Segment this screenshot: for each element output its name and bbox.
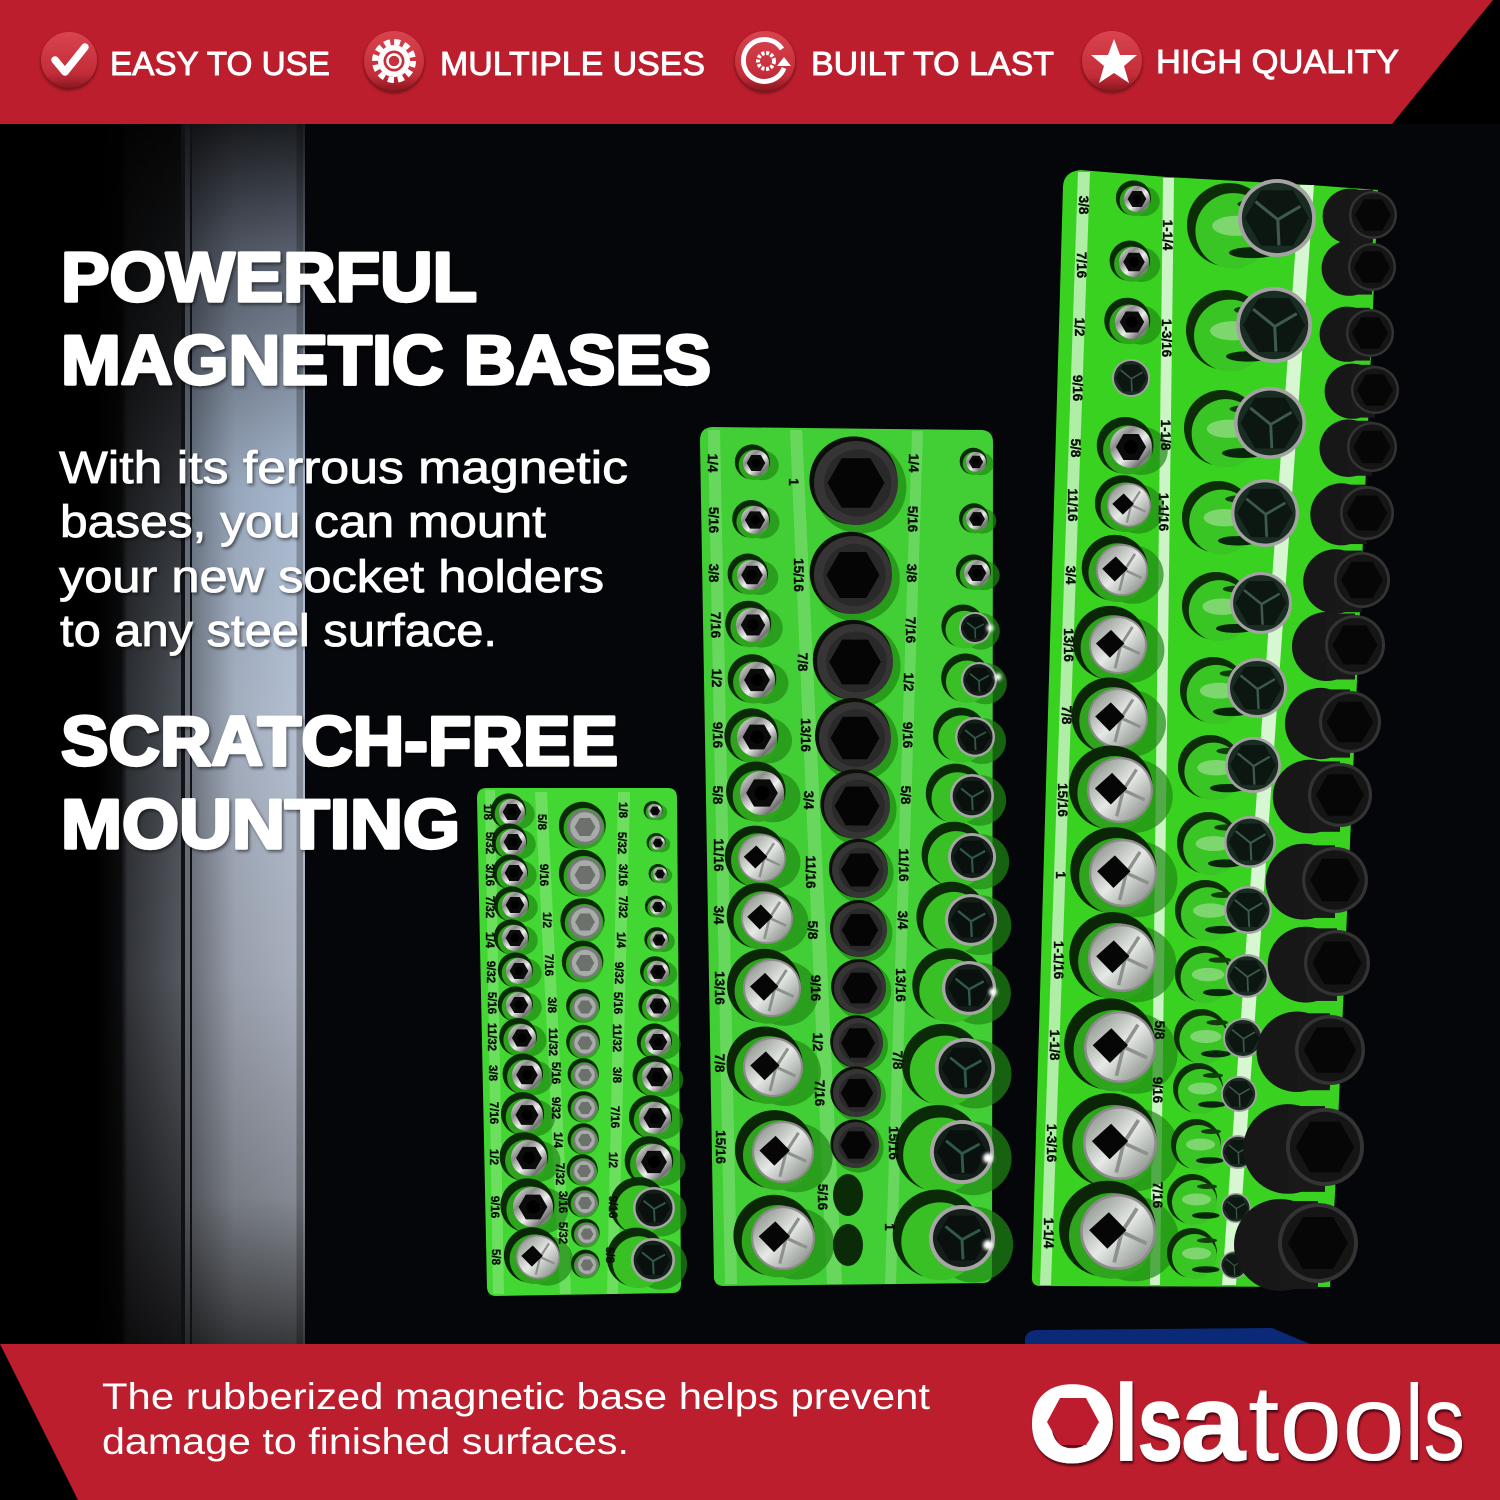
middle tray column 3 sockets and labels: 9/16	[900, 722, 915, 749]
small tray column 3 sockets and labels	[603, 801, 687, 1290]
small tray column 1 sockets and labels: 11/32	[485, 1023, 497, 1051]
middle tray column 1 sockets and labels: 3/8	[706, 564, 721, 583]
small tray column 3 sockets and labels: 3/16	[616, 864, 628, 886]
middle tray column 2 impact sockets and labels: 7/8	[795, 653, 810, 672]
middle tray column 1 sockets and labels: 15/16	[713, 1130, 728, 1164]
top banner	[0, 0, 1493, 124]
middle tray column 3 sockets and labels: 3/4	[895, 911, 910, 930]
middle tray column 3 sockets and labels: 1/2	[901, 673, 916, 691]
middle tray column 3 sockets and labels: 7/8	[890, 1051, 905, 1070]
small tray column 1 sockets and labels: 5/32	[483, 832, 495, 854]
icon: refresh gear	[735, 31, 795, 91]
middle tray column 2 impact sockets and labels: 7/16	[812, 1080, 827, 1107]
small tray column 1 sockets and labels: 1/4	[483, 932, 495, 949]
socket holder: large tray	[1032, 170, 1399, 1291]
icon: star	[1082, 31, 1142, 91]
middle tray column 2 impact sockets and labels: 11/16	[803, 855, 818, 889]
middle tray column 3 sockets and labels: 15/16	[886, 1126, 901, 1160]
small tray column 3 sockets and labels: 1/4	[614, 932, 626, 949]
large tray column 2 sockets and labels: 1-1/4	[1160, 220, 1175, 251]
small tray column 1 sockets and labels: 3/16	[483, 864, 495, 886]
middle tray column 3 sockets and labels: 5/16	[905, 506, 920, 533]
middle tray column 2 impact sockets and labels: 1	[786, 478, 801, 486]
middle tray column 2 impact sockets and labels: 13/16	[798, 718, 813, 752]
large tray column 1 sockets and labels: 1-1/8	[1047, 1030, 1062, 1061]
large tray column 1 sockets and labels: 11/16	[1065, 488, 1080, 522]
small tray column 2 bit sockets and labels: 9/32	[549, 1097, 561, 1119]
large tray column 1 sockets and labels: 1/2	[1072, 318, 1087, 336]
middle tray column 2 impact sockets and labels: 9/16	[808, 975, 823, 1002]
feature label: built to last: BUILT TO LAST	[811, 45, 1054, 82]
logo: Olsatools: ls	[1405, 1362, 1465, 1483]
socket holder: middle tray	[700, 427, 1013, 1286]
middle tray column 1 sockets and labels: 5/16	[706, 507, 721, 534]
small tray column 2 bit sockets and labels: 5/16	[549, 1062, 561, 1084]
text block: magnetic base description	[59, 442, 628, 656]
small tray column 3 sockets and labels: 1/2	[606, 1152, 618, 1168]
small tray column 3 sockets and labels: 1/8	[616, 802, 628, 819]
middle tray column 1 sockets and labels: 1/4	[705, 454, 720, 473]
text block: magnetic base description: your new socket holders	[59, 551, 604, 602]
middle tray column 2 impact sockets and labels: 3/4	[801, 791, 816, 810]
large tray column 1 sockets and labels: 1-1/16	[1051, 941, 1066, 980]
text block: magnetic base description: bases, you can mount	[60, 496, 547, 547]
middle tray column 1 sockets and labels: 7/16	[708, 612, 723, 639]
small tray column 2 bit sockets and labels: 5/32	[556, 1222, 568, 1244]
large tray column 1 sockets and labels: 1	[1053, 871, 1068, 879]
middle tray column 2 impact sockets and labels: 15/16	[791, 558, 806, 592]
heading: powerful magnetic bases: POWERFUL	[61, 238, 477, 316]
small tray column 3 sockets and labels: 5/32	[615, 832, 627, 854]
small tray column 2 bit sockets and labels: 7/16	[542, 954, 554, 976]
small tray column 1 sockets and labels: 7/16	[487, 1102, 499, 1124]
logo: Olsatools: ls	[1115, 1362, 1183, 1483]
text block: rubberized base note: The rubberized magnetic base helps prevent	[102, 1376, 931, 1417]
middle tray column 1 sockets and labels: 11/16	[711, 838, 726, 872]
large tray column 1 sockets and labels	[1041, 180, 1179, 1281]
small tray column 2 bit sockets and labels: 7/32	[553, 1163, 565, 1185]
middle tray column 3 sockets and labels: 13/16	[893, 968, 908, 1002]
large tray column 2 sockets and labels: 1-1/8	[1158, 420, 1173, 451]
socket holder: small tray	[477, 788, 687, 1296]
small tray column 1 sockets and labels: 3/8	[486, 1065, 498, 1082]
middle tray column 3 sockets and labels: 7/16	[903, 617, 918, 644]
heading: scratch-free mounting: MOUNTING	[61, 785, 460, 863]
blue object peeking above footer	[1025, 1328, 1310, 1344]
middle tray column 1 sockets and labels: 9/16	[710, 722, 725, 749]
small tray column 1 sockets and labels: 7/32	[483, 896, 495, 918]
large tray column 2 sockets and labels: 5/8	[1152, 1021, 1167, 1040]
logo: Olsatools: a	[1181, 1362, 1246, 1483]
small tray column 3 sockets and labels: 7/16	[608, 1106, 620, 1128]
logo: Olsatools: too	[1248, 1362, 1405, 1483]
logo: Olsatools: O	[1029, 1363, 1116, 1484]
heading: powerful magnetic bases	[61, 238, 711, 399]
middle tray column 3 sockets and labels	[882, 448, 1013, 1283]
heading: powerful magnetic bases: MAGNETIC BASES	[61, 321, 711, 399]
small tray column 2 bit sockets and labels: 1/4	[551, 1132, 563, 1149]
middle tray column 2 impact sockets and labels: 5/8	[805, 921, 820, 940]
small tray column 3 sockets and labels: 9/16	[606, 1196, 618, 1218]
middle tray column 3 sockets and labels: 1/4	[906, 454, 921, 473]
small tray column 1 sockets and labels: 1/8	[481, 804, 493, 821]
middle tray column 1 sockets and labels: 7/8	[712, 1054, 727, 1073]
feature label: multiple uses: MULTIPLE USES	[440, 45, 705, 82]
middle tray column 2 impact sockets and labels: 1/2	[810, 1033, 825, 1051]
small tray column 1 sockets and labels: 9/32	[484, 961, 496, 983]
heading: scratch-free mounting	[61, 702, 618, 863]
small tray column 3 sockets and labels: 5/16	[611, 992, 623, 1014]
large tray column 2 sockets and labels: 7/16	[1150, 1182, 1165, 1209]
middle tray column 2 impact sockets and labels	[786, 436, 906, 1266]
large tray column 1 sockets and labels: 1-3/16	[1044, 1124, 1059, 1163]
icon: check mark	[41, 32, 97, 88]
middle tray column 3 sockets and labels: 1	[882, 1223, 897, 1231]
middle tray column 1 sockets and labels: 1/2	[709, 669, 724, 687]
large tray column 1 sockets and labels: 9/16	[1070, 375, 1085, 402]
small tray column 1 sockets and labels: 1/2	[487, 1149, 499, 1165]
small tray column 2 bit sockets and labels: 3/8	[545, 997, 557, 1014]
large tray column 1 sockets and labels: 7/16	[1074, 252, 1089, 279]
small tray column 3 sockets and labels: 7/32	[616, 896, 628, 918]
middle tray column 1 sockets and labels: 3/4	[711, 906, 726, 925]
small tray column 3 sockets and labels: 11/32	[610, 1024, 622, 1052]
large tray column 2 sockets and labels: 1-1/16	[1156, 493, 1171, 532]
middle tray column 3 sockets and labels: 3/8	[904, 564, 919, 583]
small tray column 1 sockets and labels	[481, 793, 573, 1286]
middle tray column 2 impact sockets and labels: 5/16	[815, 1184, 830, 1211]
logo: Olsatools	[1029, 1362, 1465, 1484]
small tray column 2 bit sockets and labels	[535, 802, 606, 1278]
large tray column 1 sockets and labels: 15/16	[1055, 783, 1070, 817]
icon: gear	[364, 31, 424, 91]
small tray column 2 bit sockets and labels: 3/16	[556, 1191, 568, 1213]
middle tray column 1 sockets and labels	[705, 444, 834, 1280]
large tray column 1 sockets and labels: 3/4	[1063, 566, 1078, 585]
large tray column 1 sockets and labels: 7/8	[1059, 706, 1074, 725]
middle tray column 1 sockets and labels: 13/16	[712, 971, 727, 1005]
text block: magnetic base description: to any steel surface.	[60, 605, 497, 656]
feature label: easy to use: EASY TO USE	[110, 45, 330, 82]
middle tray column 3 sockets and labels: 5/8	[898, 786, 913, 805]
small tray column 3 sockets and labels: 9/32	[612, 962, 624, 984]
large tray column 2 sockets and labels: 1-3/16	[1159, 319, 1174, 358]
small tray column 3 sockets and labels: 3/8	[610, 1067, 622, 1084]
large tray column 1 sockets and labels: 1-1/4	[1041, 1218, 1056, 1249]
small tray column 1 sockets and labels: 5/8	[489, 1249, 501, 1266]
small tray column 3 sockets and labels: 5/8	[603, 1247, 615, 1264]
large tray column 1 sockets and labels: 5/8	[1068, 439, 1083, 458]
large tray column 2 sockets and labels: 9/16	[1150, 1077, 1165, 1104]
large tray column 1 sockets and labels: 13/16	[1061, 628, 1076, 662]
large tray column 3 dark impact sockets	[1234, 189, 1399, 1291]
small tray column 2 bit sockets and labels: 9/16	[537, 864, 549, 886]
large tray column 2 sockets and labels	[1150, 179, 1316, 1279]
small tray column 1 sockets and labels: 5/16	[485, 992, 497, 1014]
heading: scratch-free mounting: SCRATCH-FREE	[61, 702, 618, 780]
bottom banner	[0, 1344, 1500, 1500]
large tray column 1 sockets and labels: 3/8	[1076, 196, 1091, 215]
small tray column 2 bit sockets and labels: 5/8	[535, 814, 547, 831]
text block: rubberized base note	[102, 1376, 931, 1462]
middle tray column 3 sockets and labels: 11/16	[896, 848, 911, 882]
small tray column 1 sockets and labels: 9/16	[488, 1196, 500, 1218]
middle tray column 1 sockets and labels: 5/8	[710, 786, 725, 805]
feature label: high quality: HIGH QUALITY	[1156, 43, 1399, 80]
small tray column 2 bit sockets and labels: 11/32	[546, 1028, 558, 1056]
text block: rubberized base note: damage to finished surfaces.	[102, 1421, 629, 1462]
small tray column 2 bit sockets and labels: 1/2	[540, 912, 552, 928]
text block: magnetic base description: With its ferrous magnetic	[59, 442, 628, 493]
